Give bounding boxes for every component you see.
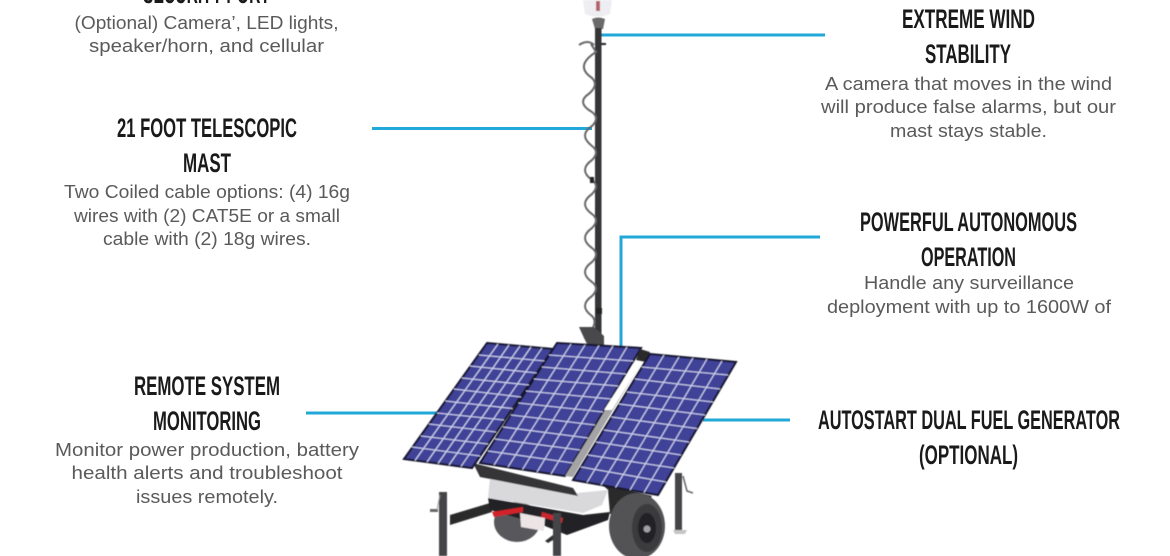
mast with camera pod and coiled cable — [579, 0, 612, 346]
text block: telescopic mast: wires with (2) CAT5E or a small — [73, 206, 340, 226]
text block: remote monitoring: REMOTE SYSTEM — [134, 371, 280, 401]
text block: extreme wind stability: will produce false alarms, but our — [820, 97, 1116, 117]
white tag — [520, 513, 545, 531]
panel: middle — [480, 343, 641, 476]
red straps — [492, 507, 523, 517]
text block: telescopic mast: MAST — [183, 148, 231, 178]
text block: remote monitoring: health alerts and troubleshoot — [72, 463, 342, 483]
text block: security pod: speaker/horn, and cellular — [89, 36, 324, 56]
text block: extreme wind stability — [820, 4, 1116, 141]
trailer — [430, 463, 693, 556]
text block: autonomous operation — [827, 207, 1112, 317]
mast base bracket — [579, 327, 604, 346]
text block: autonomous operation: Handle any surveillance — [864, 273, 1074, 293]
text block: extreme wind stability: mast stays stable. — [890, 121, 1047, 141]
callout line: generator — [703, 418, 790, 422]
rear wheel — [494, 502, 540, 542]
text block: autonomous operation: OPERATION — [921, 242, 1016, 272]
tongue frame — [450, 503, 492, 525]
text block: telescopic mast: Two Coiled cable options: (4) 16g — [64, 182, 350, 202]
panel: right — [573, 354, 736, 495]
text block: telescopic mast: cable with (2) 18g wires. — [103, 229, 311, 249]
text block: extreme wind stability: EXTREME WIND — [902, 4, 1035, 34]
chassis — [488, 498, 610, 535]
text block: remote monitoring: issues remotely. — [136, 487, 278, 507]
icon: security pod — [583, 0, 612, 29]
panel gap bar — [565, 365, 640, 477]
text block: remote monitoring: Monitor power production, battery — [55, 440, 359, 460]
coiled cable — [579, 42, 596, 332]
text block: autonomous operation: deployment with up to 1600W of — [827, 297, 1112, 317]
callout line: telescopic mast — [372, 127, 592, 130]
text block: remote monitoring: MONITORING — [153, 406, 261, 436]
text block: extreme wind stability: STABILITY — [925, 39, 1011, 69]
solar panels — [404, 343, 736, 495]
wheel — [609, 493, 665, 556]
text block: telescopic mast — [64, 113, 350, 249]
text block: telescopic mast: 21 FOOT TELESCOPIC — [117, 113, 297, 143]
jack stands — [439, 492, 447, 556]
silver battery box — [488, 478, 608, 513]
text block: generator — [818, 405, 1120, 470]
panel: left — [404, 343, 553, 468]
text block: generator: (OPTIONAL) — [919, 440, 1018, 470]
text block: extreme wind stability: A camera that moves in the wind — [825, 74, 1112, 94]
callout line: security pod — [600, 34, 825, 36]
text block: remote monitoring — [55, 371, 359, 507]
callout line: autonomous operation — [621, 237, 820, 347]
text block: security pod — [74, 0, 338, 56]
dark bar under panels — [473, 463, 578, 496]
callout line: remote monitoring — [306, 412, 438, 414]
mast pole — [595, 28, 602, 344]
text block: security pod: (Optional) Camera’, LED lights, — [74, 13, 338, 33]
